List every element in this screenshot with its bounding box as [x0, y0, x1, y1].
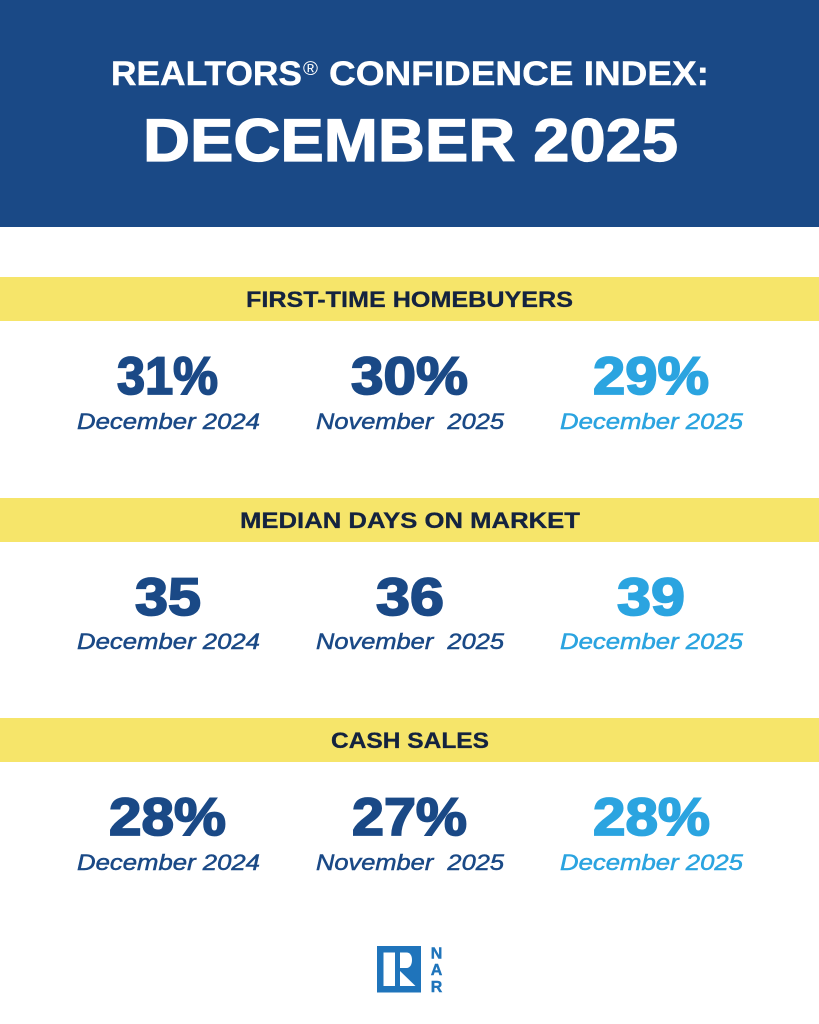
stat: November 2025: 36 — [376, 568, 444, 627]
stat: December 2024 — [77, 788, 260, 875]
title line one: REALTORS — [111, 55, 302, 93]
stat: November 2025: November 2025 — [316, 629, 505, 654]
section bar: FIRST-TIME HOMEBUYERS — [246, 287, 573, 312]
stat: December 2024: December 2024 — [77, 409, 260, 434]
title line one: CONFIDENCE INDEX: — [329, 55, 709, 93]
stat: December 2025: 39 — [617, 568, 685, 627]
stat: December 2025 — [560, 347, 744, 434]
stat: December 2025: December 2025 — [560, 629, 744, 654]
header banner — [0, 0, 819, 227]
section bar — [0, 718, 819, 762]
stat: December 2024 — [77, 347, 260, 434]
section bar — [0, 277, 819, 321]
section bar — [0, 498, 819, 542]
stat: December 2024: 28% — [109, 788, 226, 847]
panel: first-time homebuyers — [0, 277, 819, 434]
panel: cash sales — [0, 718, 819, 875]
stat: November 2025 — [316, 347, 505, 434]
stat: November 2025 — [316, 788, 505, 875]
section bar: CASH SALES — [331, 728, 489, 753]
stat: December 2024: December 2024 — [77, 850, 260, 875]
icon: NAR logo: A — [431, 962, 443, 979]
title line two: DECEMBER 2025 — [143, 107, 678, 174]
stat: December 2025: 28% — [593, 788, 710, 847]
stat: November 2025: 27% — [352, 788, 467, 847]
section bar: MEDIAN DAYS ON MARKET — [240, 508, 580, 533]
stat: December 2025: December 2025 — [560, 409, 744, 434]
icon: NAR logo: R — [431, 979, 443, 996]
stat: December 2024 — [77, 568, 260, 654]
stat: November 2025: November 2025 — [316, 850, 505, 875]
stat: November 2025 — [316, 568, 505, 654]
stat: November 2025: 30% — [351, 347, 468, 406]
stat: November 2025: November 2025 — [316, 409, 505, 434]
stat: December 2025 — [560, 788, 744, 875]
panel: median days on market — [0, 498, 819, 654]
stat: December 2024: 31% — [117, 347, 218, 406]
icon: NAR logo: N — [431, 946, 442, 962]
icon: NAR logo — [377, 946, 443, 996]
stat: December 2025: December 2025 — [560, 850, 744, 875]
stat: December 2024: December 2024 — [77, 629, 260, 654]
stat: December 2024: 35 — [135, 568, 201, 627]
stat: December 2025 — [560, 568, 744, 654]
title line one — [111, 55, 709, 93]
stat: December 2025: 29% — [593, 347, 709, 406]
title line one: ® — [303, 59, 318, 80]
